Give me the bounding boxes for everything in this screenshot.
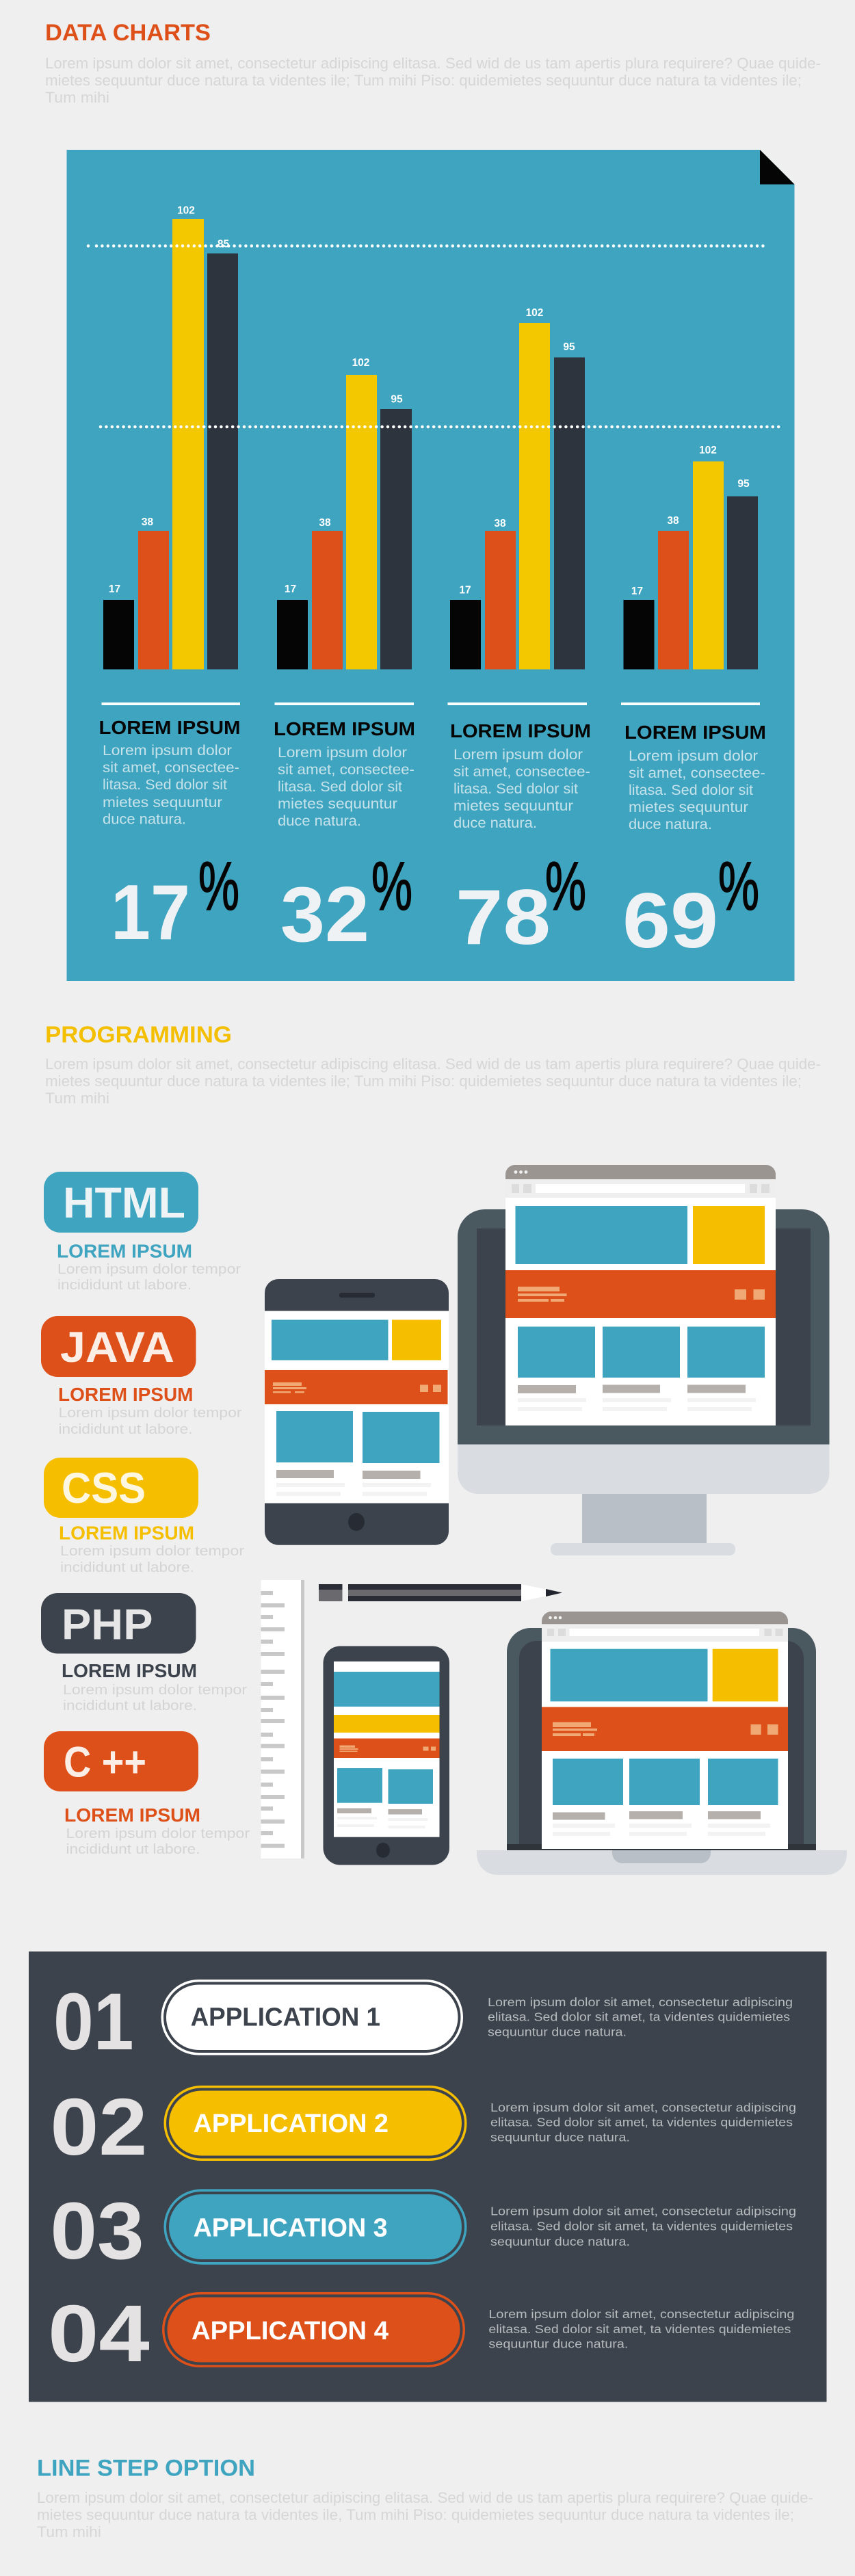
bar chart: group 4: 95 (737, 478, 750, 490)
column text: lorem ipsum 4: litasa. Sed dolor sit (629, 783, 753, 798)
column text: lorem ipsum 3: Lorem ipsum dolor (453, 747, 583, 763)
application row 4: 04 (48, 2289, 150, 2379)
text block: programming intro: mietes sequuntur duce natura ta videntes ile; Tum mihi Piso: quidemietes sequuntur duce natura ta videntes ile; (45, 1073, 802, 1090)
text block: programming intro: Tum mihi (45, 1090, 109, 1107)
text block: line step intro: Lorem ipsum dolor sit amet, consectetur adipiscing elitasa. Sed wid de us tam apertis plura requirere? Quae quide- (37, 2489, 813, 2506)
section: data charts header (45, 20, 821, 106)
application row 2: elitasa. Sed dolor sit amet, ta videntes quidemietes (490, 2115, 793, 2129)
application row 3: APPLICATION 3 (194, 2213, 388, 2242)
column text: lorem ipsum 3: litasa. Sed dolor sit (453, 781, 578, 797)
application row 3: 03 (50, 2186, 144, 2276)
text block: line step intro: mietes sequuntur duce natura ta videntes ile, Tum mihi Piso: quidemietes sequuntur duce natura ta videntes ile; (37, 2506, 794, 2523)
column text: lorem ipsum 4 (621, 702, 766, 832)
bar chart: group 2: 95 (391, 394, 403, 405)
column text: lorem ipsum 1: LOREM IPSUM (98, 717, 241, 738)
bar chart: group 1: 102 (177, 205, 195, 216)
language item: php: Lorem ipsum dolor tempor (63, 1683, 247, 1698)
language item: php: PHP (62, 1601, 153, 1648)
panel: data charts (67, 150, 795, 981)
language item: c++: C ++ (64, 1739, 146, 1787)
text block: data charts intro: mietes sequuntur duce natura ta videntes ile; Tum mihi Piso: quidemietes sequuntur duce natura ta videntes ile; (45, 72, 802, 89)
illustration: laptop (477, 1612, 847, 1875)
bar chart: group 3: 38 (494, 518, 506, 529)
column text: lorem ipsum 2: duce natura. (278, 813, 361, 829)
stat: 69 percent (622, 848, 759, 964)
column text: lorem ipsum 2 (274, 702, 415, 829)
column text: lorem ipsum 2: mietes sequuntur (278, 796, 397, 812)
application row 1: 01 (53, 1977, 134, 2067)
application row 4 (48, 2289, 794, 2379)
illustration: tablet (265, 1279, 449, 1545)
title: data charts: DATA CHARTS (45, 20, 211, 46)
bar chart: group 3: 17 (459, 584, 471, 596)
language item: c++: LOREM IPSUM (64, 1804, 200, 1826)
column text: lorem ipsum 3: sit amet, consectee- (453, 764, 590, 780)
language item: html: LOREM IPSUM (57, 1241, 192, 1261)
column text: lorem ipsum 4: sit amet, consectee- (629, 765, 765, 781)
stat: 78 percent: % (545, 848, 586, 925)
column text: lorem ipsum 1: sit amet, consectee- (103, 760, 239, 776)
column text: lorem ipsum 1: Lorem ipsum dolor (103, 743, 232, 759)
application row 4: Lorem ipsum dolor sit amet, consectetur adipiscing (488, 2307, 794, 2321)
language item: html: Lorem ipsum dolor tempor (57, 1262, 241, 1277)
bar chart: group 2: 102 (352, 357, 369, 369)
application row 4: elitasa. Sed dolor sit amet, ta videntes quidemietes (488, 2322, 791, 2336)
icon: pencil (319, 1584, 562, 1601)
stat: 69 percent: 69 (622, 878, 718, 964)
text block: line step intro (37, 2489, 813, 2540)
bar chart: group 4: 38 (667, 515, 679, 527)
text block: data charts intro: Lorem ipsum dolor sit amet, consectetur adipiscing elitasa. Sed wid de us tam apertis plura requirere? Quae quide- (45, 55, 821, 72)
bar chart: group 4: 17 (631, 586, 643, 597)
text block: line step intro: Tum mihi (37, 2523, 101, 2540)
application row 3: Lorem ipsum dolor sit amet, consectetur adipiscing (490, 2204, 796, 2218)
application row 2: APPLICATION 2 (194, 2110, 389, 2138)
language item: php: LOREM IPSUM (62, 1660, 197, 1681)
application row 4: sequuntur duce natura. (488, 2337, 628, 2350)
stat: 17 percent (111, 848, 239, 956)
language item: c++: Lorem ipsum dolor tempor (66, 1826, 250, 1841)
browser window: desktop (505, 1165, 776, 1425)
language item: java (41, 1316, 242, 1437)
language item: css: Lorem ipsum dolor tempor (60, 1544, 244, 1559)
stat: 17 percent: 17 (111, 869, 190, 956)
icon: ruler (261, 1580, 304, 1858)
application row 3: sequuntur duce natura. (490, 2235, 630, 2248)
browser window: laptop (542, 1612, 788, 1849)
text block: data charts intro: Tum mihi (45, 89, 109, 106)
column text: lorem ipsum 4: LOREM IPSUM (624, 722, 766, 743)
column text: lorem ipsum 3: duce natura. (453, 815, 537, 831)
bar chart: group 2: 38 (319, 517, 331, 529)
bar chart: group 3: 95 (563, 341, 575, 353)
application row 2: Lorem ipsum dolor sit amet, consectetur adipiscing (490, 2101, 796, 2114)
column text: lorem ipsum 4: Lorem ipsum dolor (629, 748, 758, 764)
application row 4: APPLICATION 4 (192, 2317, 389, 2345)
application row 3: elitasa. Sed dolor sit amet, ta videntes quidemietes (490, 2220, 793, 2233)
application row 1: APPLICATION 1 (191, 2003, 380, 2032)
column text: lorem ipsum 2: LOREM IPSUM (274, 718, 415, 739)
language item: css: incididunt ut labore. (60, 1560, 194, 1575)
column text: lorem ipsum 3 (447, 702, 591, 831)
bar chart: group 1: 85 (218, 238, 229, 250)
application row 1: sequuntur duce natura. (488, 2025, 627, 2039)
icon: folded corner (760, 150, 795, 185)
bar chart: group 1: 17 (109, 583, 120, 595)
column text: lorem ipsum 2: sit amet, consectee- (278, 762, 415, 778)
stat: 69 percent: % (718, 848, 759, 925)
section: programming header (45, 1022, 821, 1107)
language item: java: Lorem ipsum dolor tempor (59, 1406, 242, 1421)
language item: html: incididunt ut labore. (57, 1278, 192, 1293)
language item: java: LOREM IPSUM (58, 1384, 193, 1405)
stat: 78 percent: 78 (456, 874, 551, 961)
bar chart: group 4 (624, 445, 758, 669)
text block: programming intro: Lorem ipsum dolor sit amet, consectetur adipiscing elitasa. Sed wid de us tam apertis plura requirere? Quae quide- (45, 1055, 821, 1073)
title: programming: PROGRAMMING (45, 1022, 232, 1048)
stat: 32 percent (280, 848, 412, 958)
stat: 32 percent: % (371, 848, 412, 925)
bar chart: group 2: 17 (285, 583, 296, 595)
language item: c++: incididunt ut labore. (66, 1842, 200, 1857)
column text: lorem ipsum 1: litasa. Sed dolor sit (103, 777, 227, 793)
application row 3 (50, 2186, 796, 2276)
language item: c++ (44, 1731, 250, 1857)
application row 2 (50, 2082, 796, 2172)
language item: java: incididunt ut labore. (59, 1422, 193, 1437)
title: line step option: LINE STEP OPTION (37, 2456, 255, 2482)
application row 1 (53, 1977, 793, 2067)
column text: lorem ipsum 4: duce natura. (629, 817, 712, 832)
column text: lorem ipsum 3: mietes sequuntur (453, 798, 573, 814)
panel: applications (29, 1951, 826, 2402)
text block: data charts intro (45, 55, 821, 106)
column text: lorem ipsum 4: mietes sequuntur (629, 800, 748, 815)
language item: html (44, 1172, 241, 1293)
application row 1: elitasa. Sed dolor sit amet, ta videntes quidemietes (488, 2010, 790, 2023)
language item: html: HTML (63, 1179, 185, 1227)
language item: css: CSS (62, 1464, 146, 1512)
bar chart: group 1: 38 (142, 516, 153, 528)
bar chart: group 3: 102 (526, 307, 543, 319)
illustration: phone (323, 1646, 449, 1865)
language item: css (44, 1458, 244, 1575)
stat: 32 percent: 32 (280, 871, 369, 958)
bar chart: group 1 (103, 205, 238, 669)
application row 1: Lorem ipsum dolor sit amet, consectetur adipiscing (488, 1995, 793, 2009)
stat: 17 percent: % (198, 848, 239, 925)
column text: lorem ipsum 1 (98, 702, 241, 828)
bar chart: group 2 (277, 357, 412, 669)
application row 2: 02 (50, 2082, 147, 2172)
column text: lorem ipsum 1: duce natura. (103, 811, 186, 828)
section: line step option header (37, 2456, 813, 2540)
illustration: desktop monitor (458, 1165, 829, 1555)
column text: lorem ipsum 2: Lorem ipsum dolor (278, 745, 407, 761)
application row 2: sequuntur duce natura. (490, 2131, 630, 2144)
column text: lorem ipsum 3: LOREM IPSUM (450, 720, 591, 741)
column text: lorem ipsum 1: mietes sequuntur (103, 795, 222, 811)
language item: css: LOREM IPSUM (59, 1523, 194, 1543)
bar chart: group 3 (450, 307, 585, 669)
bar chart: group 4: 102 (699, 445, 717, 456)
language item: php: incididunt ut labore. (63, 1698, 197, 1713)
language item: php (41, 1593, 247, 1713)
stat: 78 percent (456, 848, 586, 961)
text block: programming intro (45, 1055, 821, 1107)
column text: lorem ipsum 2: litasa. Sed dolor sit (278, 779, 402, 795)
language item: java: JAVA (60, 1324, 174, 1371)
